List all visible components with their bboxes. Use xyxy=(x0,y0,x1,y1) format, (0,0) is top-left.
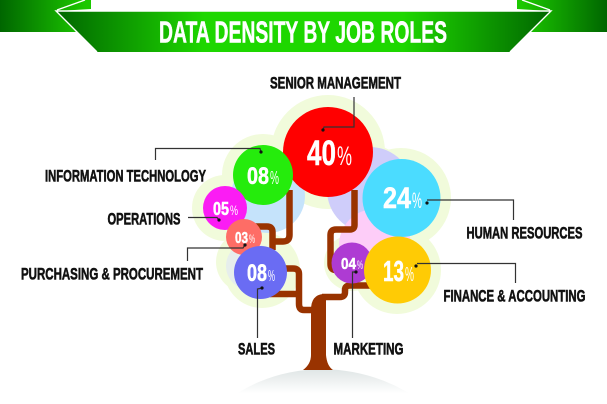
title text: DATA DENSITY BY JOB ROLES xyxy=(159,14,447,50)
circle: purchasing 03% xyxy=(226,219,262,255)
branches xyxy=(280,268,312,310)
circle: marketing 04%: % xyxy=(357,258,363,272)
label: senior management: SENIOR MANAGEMENT xyxy=(270,74,401,92)
tree xyxy=(244,190,372,370)
label: operations: OPERATIONS xyxy=(108,210,180,228)
circle: information technology 08% xyxy=(233,145,293,205)
circle: operations 05%: 05 xyxy=(213,199,229,219)
leader lines xyxy=(156,97,516,338)
circle: purchasing 03%: % xyxy=(249,232,255,246)
banner body xyxy=(56,11,551,52)
circle: senior management 40% xyxy=(283,107,373,197)
circle: senior management 40%: % xyxy=(337,141,352,171)
ground mound xyxy=(222,369,425,404)
label: sales: SALES xyxy=(238,340,275,358)
circle: sales 08%: 08 xyxy=(247,260,267,287)
label: purchasing and procurement: PURCHASING & PROCUREMENT xyxy=(21,264,203,284)
circle: purchasing 03%: 03 xyxy=(235,230,248,247)
circle: operations 05% xyxy=(203,186,247,230)
circle: finance 13%: 13 xyxy=(383,256,404,288)
circle: information technology 08%: % xyxy=(270,168,279,188)
circle: operations 05%: % xyxy=(230,202,238,218)
title banner xyxy=(0,0,607,52)
circle: senior management 40%: 40 xyxy=(307,134,336,173)
label: marketing: MARKETING xyxy=(334,340,404,358)
left ribbon tail xyxy=(0,0,91,32)
circle: human resources 24% xyxy=(362,159,440,237)
circle: marketing 04% xyxy=(332,242,372,284)
circle: information technology 08%: 08 xyxy=(247,163,269,190)
soft background circles xyxy=(226,147,413,290)
circle: finance 13%: % xyxy=(405,264,414,286)
label: information technology: INFORMATION TECHNOLOGY xyxy=(45,166,206,186)
circle: sales 08% xyxy=(234,246,287,299)
circle: sales 08%: % xyxy=(268,268,275,285)
circle: human resources 24%: % xyxy=(412,188,422,213)
circle: marketing 04%: 04 xyxy=(341,256,356,273)
right ribbon tail xyxy=(517,0,607,32)
circle: human resources 24%: 24 xyxy=(383,182,411,215)
circle: finance 13% xyxy=(364,236,431,304)
trunk xyxy=(303,294,333,370)
background halos xyxy=(192,95,451,314)
